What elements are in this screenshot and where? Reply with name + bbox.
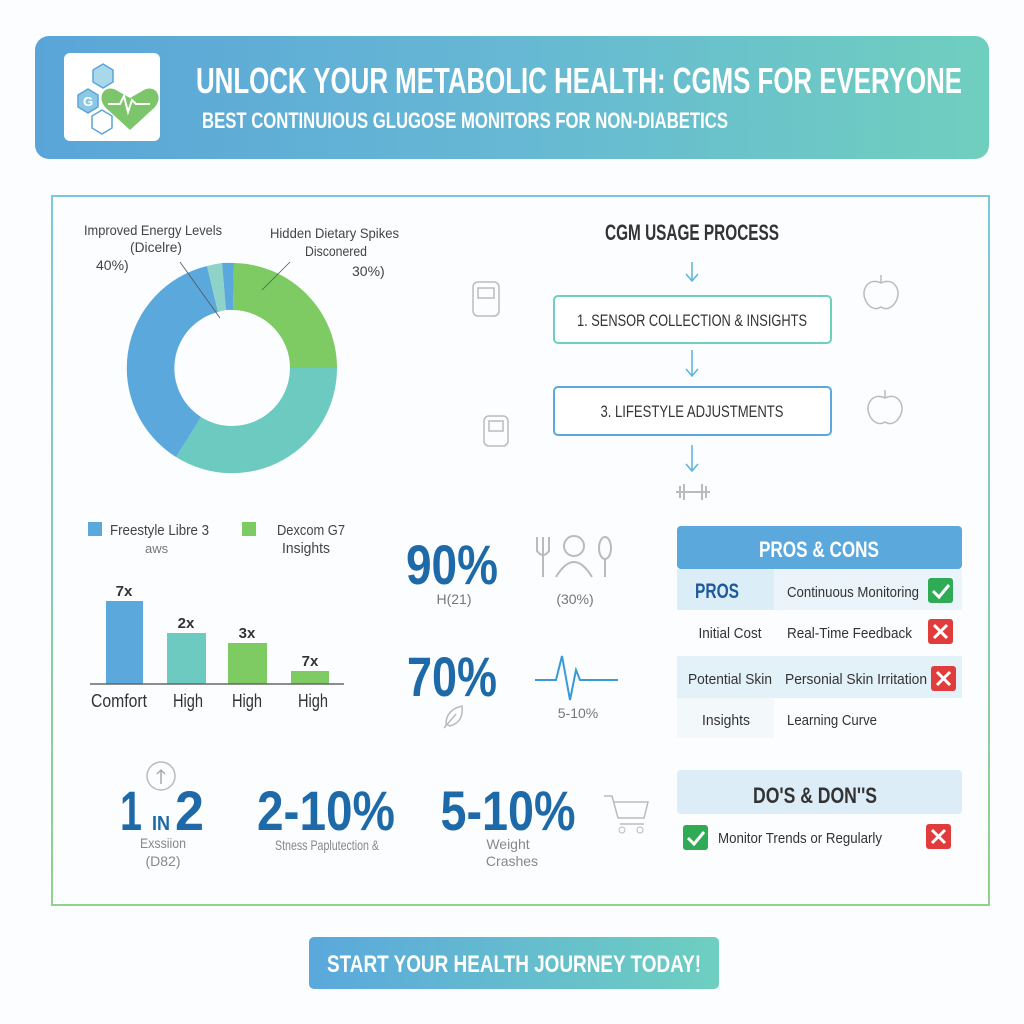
process steps [554, 262, 831, 500]
bar chart legend: Insights [282, 540, 330, 557]
bar chart: Comfort [91, 691, 147, 711]
donut chart [127, 262, 337, 473]
pros and cons table: Personial Skin Irritation [785, 671, 927, 688]
bar chart legend: aws [145, 541, 169, 556]
pros and cons table: Real-Time Feedback [787, 625, 912, 642]
stat 90%: H(21) [436, 591, 472, 607]
donut labels: 40%) [96, 257, 129, 273]
dos and donts: DO'S & DON''S [753, 783, 877, 808]
bar chart: 3x [239, 625, 256, 642]
bar chart legend [88, 522, 345, 557]
bar chart: High [173, 691, 203, 711]
stat 1 in 2: (D82) [145, 853, 181, 869]
process steps: 3. LIFESTYLE ADJUSTMENTS [600, 402, 784, 421]
stat 5-10%: Crashes [486, 853, 538, 869]
CTA button: START YOUR HEALTH JOURNEY TODAY! [327, 951, 701, 978]
stat 70%: 5-10% [558, 705, 598, 721]
logo icon [64, 53, 160, 141]
stat 2-10%: Stness Paplutection & [275, 837, 379, 853]
process heading: CGM USAGE PROCESS [605, 220, 779, 245]
stat 1 in 2: 2 [175, 779, 204, 842]
donut labels [84, 222, 399, 279]
dos and donts: Monitor Trends or Regularly [718, 830, 882, 847]
stat 90%: (30%) [556, 591, 594, 607]
bar chart legend: Dexcom G7 [277, 522, 345, 539]
donut labels: Hidden Dietary Spikes [270, 225, 399, 241]
bar chart: 7x [116, 583, 133, 600]
logo icon: G [83, 94, 93, 109]
pros and cons table: Potential Skin [688, 671, 772, 688]
decorative icons [473, 275, 902, 446]
stat 5-10%: 5-10% [440, 779, 576, 842]
subtitle: BEST CONTINUIOUS GLUGOSE MONITORS FOR NON-DIABETICS [202, 108, 728, 133]
process steps: 1. SENSOR COLLECTION & INSIGHTS [577, 311, 807, 330]
bar chart [90, 583, 344, 711]
donut labels: 30%) [352, 263, 385, 279]
stat 1 in 2: IN [152, 813, 170, 835]
pros and cons table: Learning Curve [787, 712, 877, 729]
donut labels: (Dicelre) [130, 239, 182, 255]
bar chart: High [232, 691, 262, 711]
bar chart legend: Freestyle Libre 3 [110, 522, 209, 539]
pros and cons table: Continuous Monitoring [787, 584, 919, 601]
pros and cons table: Initial Cost [698, 625, 762, 642]
stat 70%: 70% [407, 645, 497, 708]
bar chart: 7x [302, 653, 319, 670]
stat 1 in 2: 1 [120, 779, 142, 842]
stat 1 in 2 [120, 762, 204, 869]
pros and cons table: PROS [695, 580, 739, 603]
header banner [35, 36, 989, 159]
CTA button [309, 937, 719, 989]
pros and cons table [677, 526, 962, 738]
donut labels: Disconered [305, 243, 367, 259]
stat 90% [406, 533, 611, 607]
bar chart: High [298, 691, 328, 711]
stat 1 in 2: Exssiion [140, 835, 186, 851]
pros and cons table: PROS & CONS [759, 537, 879, 562]
stat 2-10%: 2-10% [257, 779, 395, 842]
donut labels: Improved Energy Levels [84, 222, 222, 238]
stat 70% [407, 645, 618, 728]
stat 90%: 90% [406, 533, 498, 596]
stat 5-10% [440, 779, 648, 869]
stat 5-10%: Weight [486, 836, 530, 852]
main frame [52, 196, 989, 905]
bar chart: 2x [178, 615, 195, 632]
dos and donts [677, 770, 962, 850]
pros and cons table: Insights [702, 712, 750, 729]
